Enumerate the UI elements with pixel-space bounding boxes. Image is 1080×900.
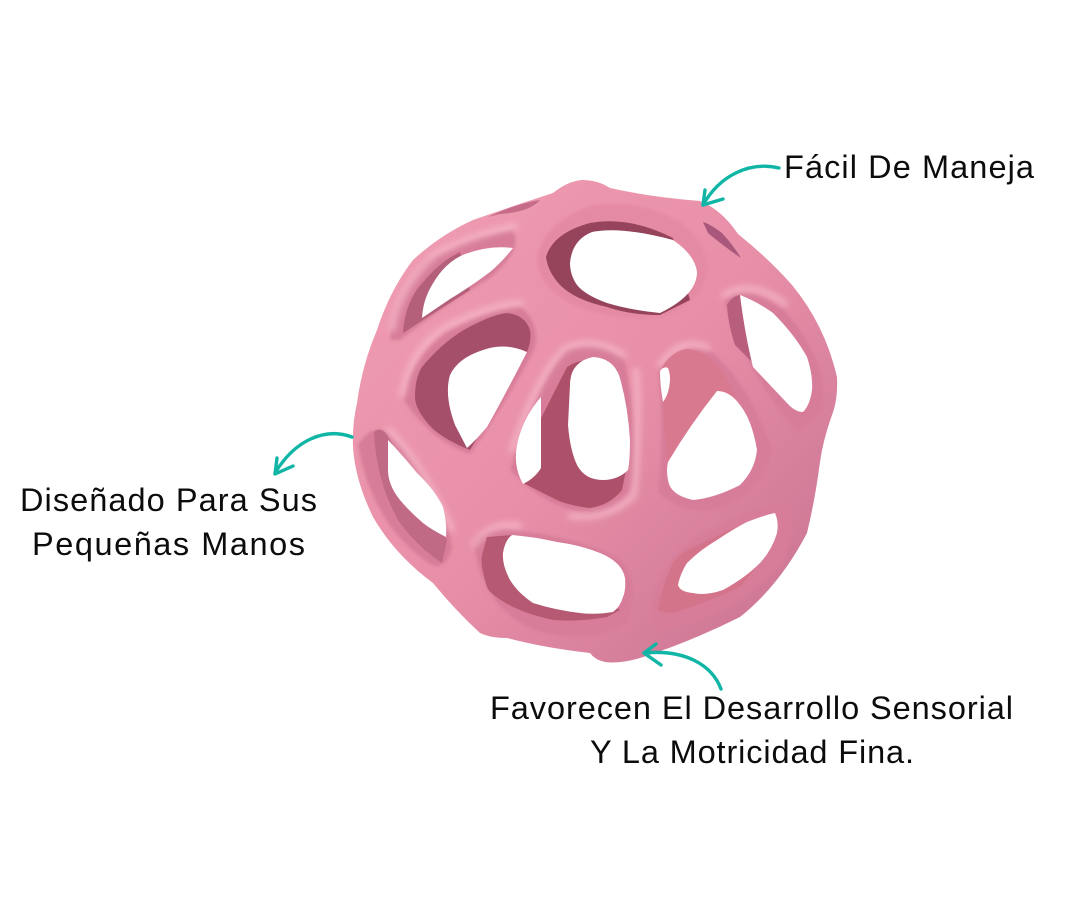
arrow: to Favorecen <box>644 644 721 689</box>
hole: far left, white opening <box>388 440 446 537</box>
hole: center, right white opening <box>568 357 630 480</box>
hole: bottom center, white opening <box>503 535 625 614</box>
top opening ring <box>537 204 708 319</box>
highlights above holes <box>388 226 785 545</box>
hole: center, shadow <box>523 360 630 508</box>
hole: left middle, shadow <box>415 313 531 450</box>
hole: center right, shadow <box>662 349 735 465</box>
hole rims shading <box>358 230 824 637</box>
hole: far left, shadow band <box>374 430 447 563</box>
label: Favorecen El Desarrollo Sensorial Y La Motricidad Fina.: Favorecen El Desarrollo Sensorial <box>490 690 1013 726</box>
label: Diseñado Para Sus Pequeñas Manos: Diseñado Para Sus <box>20 482 317 518</box>
hole: center right, small white sliver <box>660 367 670 402</box>
hole: right, shadow <box>727 295 760 370</box>
label: Diseñado Para Sus Pequeñas Manos <box>20 482 317 562</box>
hole: left middle, white opening <box>448 346 527 448</box>
label: Diseñado Para Sus Pequeñas Manos: Pequeñas Manos <box>32 526 305 562</box>
hole: upper left, shadow <box>403 252 470 333</box>
hole: bottom right, salmon shadow <box>658 522 760 613</box>
ball silhouette <box>353 180 837 662</box>
far top sliver behind the ridge <box>488 200 540 217</box>
hole: bottom right, white opening <box>678 513 778 594</box>
arrow: to Fácil De Maneja <box>703 166 779 205</box>
hole: top, inner shadow <box>546 221 690 315</box>
label: Favorecen El Desarrollo Sensorial Y La Motricidad Fina.: Y La Motricidad Fina. <box>590 734 914 770</box>
hole: far top right, shadow <box>703 222 741 258</box>
arrow: to Diseñado Para Sus <box>275 434 352 474</box>
label: Favorecen El Desarrollo Sensorial Y La Motricidad Fina. <box>490 690 1013 770</box>
hole: center right, white opening <box>667 391 757 500</box>
hole: upper left, white opening <box>422 247 513 318</box>
hole: center, left white opening <box>516 397 541 484</box>
hole: right, white opening <box>740 295 812 412</box>
hole: top, white opening <box>570 230 697 313</box>
label: Fácil De Maneja: Fácil De Maneja <box>784 149 1035 185</box>
hole: bottom center, shadow <box>482 535 620 621</box>
product: pink ball <box>353 180 837 662</box>
